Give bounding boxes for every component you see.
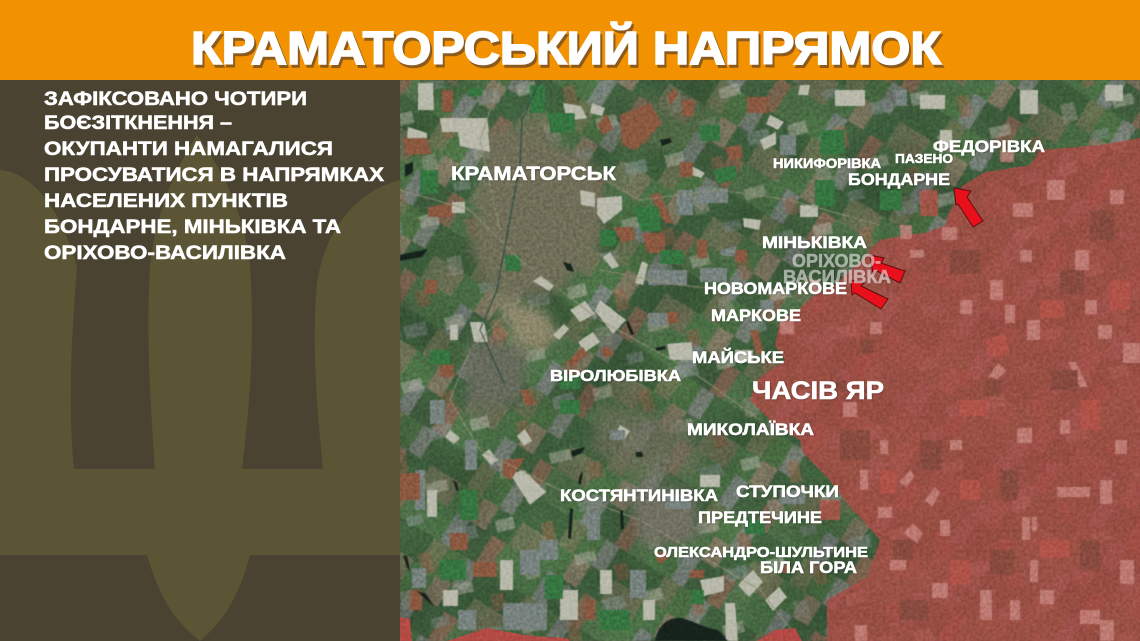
label: Часів Яр: ЧАСІВ ЯР [752, 377, 884, 405]
map: cultivated fields [400, 80, 1123, 641]
arrow: towards Оріхово-Василівка [870, 255, 905, 283]
text block: summary: ПРОСУВАТИСЯ В НАПРЯМКАХ [44, 165, 384, 186]
map: image grain [400, 80, 1140, 641]
label: Пазено: ПАЗЕНО [895, 151, 953, 166]
label: Бондарне: БОНДАРНЕ [848, 170, 950, 189]
header bar [0, 0, 1140, 80]
label: Никифорівка: НИКИФОРІВКА [773, 156, 881, 171]
panel: left text panel with trident [0, 80, 400, 641]
map: occupied pockets along bottom edge [400, 617, 802, 641]
label: Ступочки: СТУПОЧКИ [736, 482, 839, 501]
title shadow: КРАМАТОРСЬКИЙ НАПРЯМОК [193, 25, 944, 77]
label: Олександро-Шультине: ОЛЕКСАНДРО-ШУЛЬТИНЕ [654, 544, 868, 561]
map: occupied territory overlay [400, 138, 1140, 641]
text block: summary: БОЄЗІТКНЕННЯ – [44, 113, 232, 134]
map labels [451, 137, 1045, 577]
text block: summary: ЗАФІКСОВАНО ЧОТИРИ [44, 89, 307, 110]
arrow: towards Новомаркове [851, 280, 888, 309]
map: brown fields [400, 88, 790, 620]
label: Оріхово-Василівка (faded) [783, 251, 891, 287]
label: Маркове: МАРКОВЕ [711, 306, 801, 325]
label: Міньківка: МІНЬКІВКА [762, 233, 867, 252]
map: pale fields [407, 83, 1123, 641]
title: КРАМАТОРСЬКИЙ НАПРЯМОК [191, 22, 942, 74]
text block: summary: НАСЕЛЕНИХ ПУНКТІВ [44, 191, 288, 212]
map: grey fields [412, 90, 907, 630]
map: satellite view [400, 80, 1140, 641]
label: Новомаркове: НОВОМАРКОВЕ [704, 279, 847, 298]
text block: summary [44, 89, 384, 264]
label: Костянтинівка: КОСТЯНТИНІВКА [560, 486, 718, 505]
icon: trident watermark [0, 135, 400, 641]
map: bright green fields [420, 85, 902, 630]
map: dark water bodies [400, 138, 728, 641]
map: occupied-zone field blocks [780, 150, 1140, 641]
text block: summary: БОНДАРНЕ, МІНЬКІВКА ТА [44, 217, 341, 238]
text block: summary: ОРІХОВО-ВАСИЛІВКА [44, 243, 286, 264]
arrow: towards Бондарне [954, 188, 983, 227]
label: Оріхово-Василівка (faded): ОРІХОВО- [792, 251, 881, 271]
label: Миколаївка: МИКОЛАЇВКА [687, 420, 814, 439]
map: roads and ravines [400, 80, 880, 641]
text block: summary: ОКУПАНТИ НАМАГАЛИСЯ [44, 139, 333, 160]
label: Віролюбівка: ВІРОЛЮБІВКА [550, 368, 681, 385]
label: Оріхово-Василівка (faded): ВАСИЛІВКА [783, 267, 891, 287]
label: Біла Гора: БІЛА ГОРА [760, 559, 857, 577]
label: Краматорськ: КРАМАТОРСЬК [451, 163, 616, 185]
label: Федорівка: ФЕДОРІВКА [933, 137, 1045, 156]
map: urban and bare areas [465, 90, 720, 545]
label: Предтечине: ПРЕДТЕЧИНЕ [698, 508, 822, 527]
label: Майське: МАЙСЬКЕ [692, 348, 784, 367]
